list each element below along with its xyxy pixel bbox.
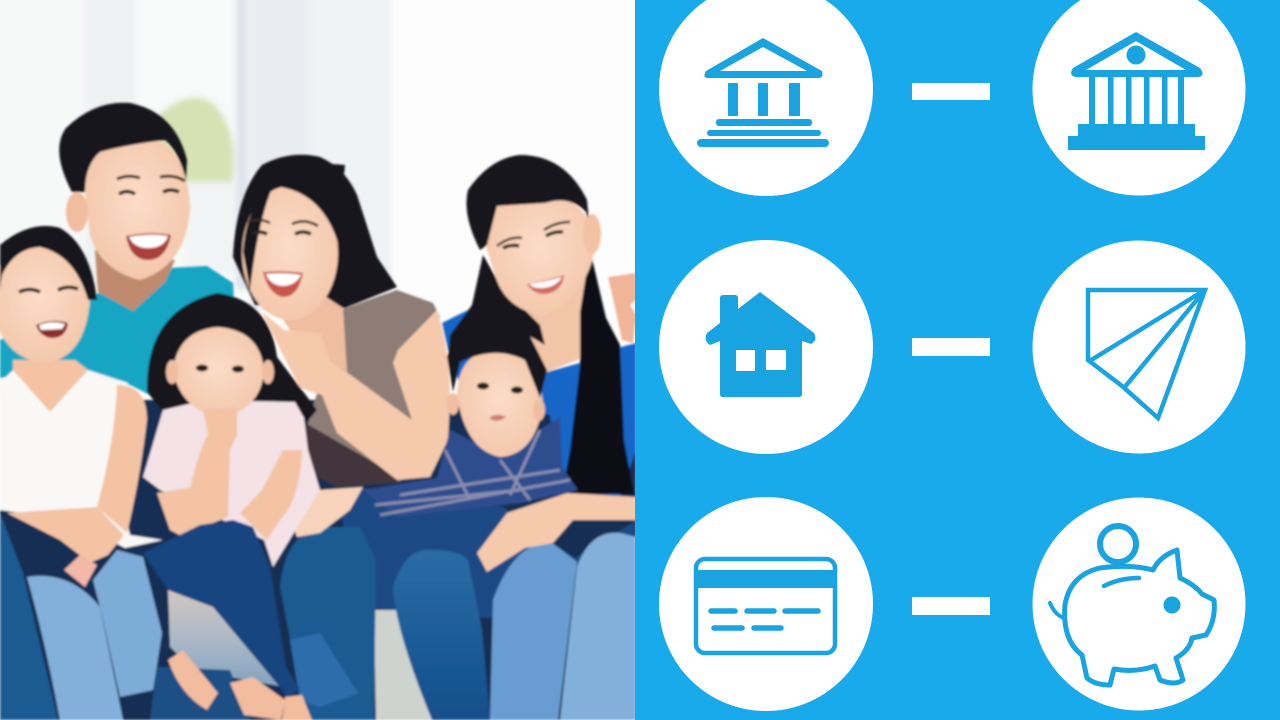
person: girl in the middle xyxy=(143,293,320,720)
circle: piggy bank xyxy=(1032,498,1246,710)
person: woman on right xyxy=(442,155,636,496)
dash 3 xyxy=(912,597,990,615)
circle: credit card xyxy=(659,497,873,711)
panel: family photo xyxy=(0,0,650,720)
circle: folded paper kite xyxy=(1032,240,1246,454)
panel: blue icon background xyxy=(635,0,1280,720)
circle: bank 1 xyxy=(659,0,873,196)
person: mother centre xyxy=(233,155,450,487)
icon: piggy bank with coin xyxy=(1050,526,1214,685)
person: adults' jeans on right xyxy=(337,488,636,720)
sofa xyxy=(374,610,434,720)
person: father xyxy=(0,103,234,400)
icon: bank with three columns xyxy=(697,38,829,147)
person: jeans of centre mother xyxy=(280,487,376,720)
person: girl on the left xyxy=(0,226,163,720)
icon: folded kite xyxy=(1088,290,1205,418)
dark base between the figures xyxy=(0,400,636,720)
icon: credit card xyxy=(696,559,835,653)
dash 1 xyxy=(912,83,990,100)
icon: bank with six columns xyxy=(1068,32,1205,150)
photo background: bright room with curtains xyxy=(0,0,650,720)
circle: house xyxy=(659,240,873,454)
dash 2 xyxy=(912,338,990,356)
icon: house xyxy=(706,292,815,397)
circle: bank 2 xyxy=(1032,0,1246,196)
person: toddler boy xyxy=(363,320,578,517)
